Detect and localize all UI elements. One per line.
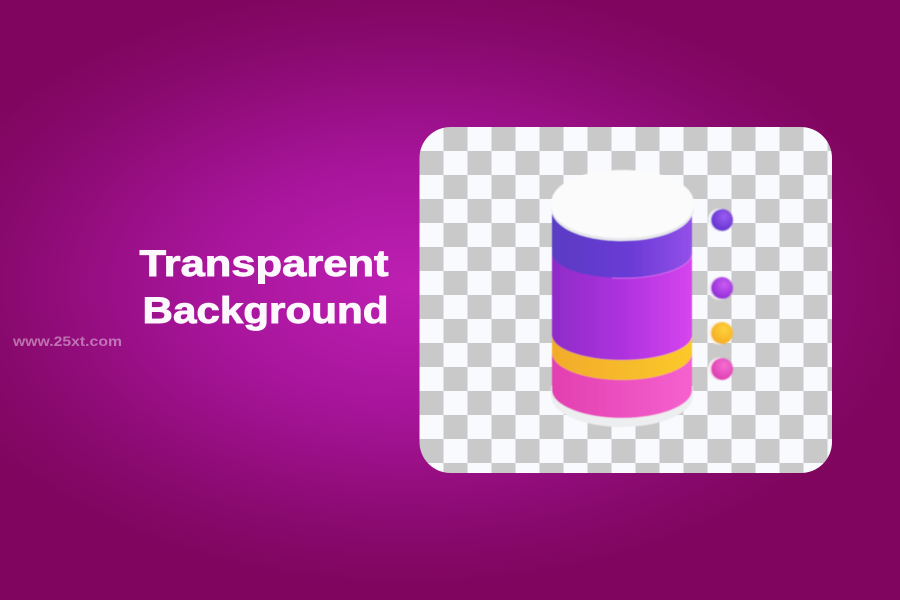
pink segment — [552, 350, 692, 418]
white base — [551, 386, 693, 427]
dot: pink — [708, 358, 733, 380]
panel: transparency checkerboard — [420, 127, 832, 473]
blue segment — [552, 210, 692, 278]
title: Transparent Background: Transparent — [140, 242, 389, 284]
watermark: www.25xt.com — [12, 333, 122, 349]
dot: blue — [708, 208, 733, 232]
violet segment — [552, 250, 692, 360]
dot: yellow — [708, 322, 733, 344]
white top face — [551, 170, 694, 238]
legend dots — [708, 208, 733, 380]
title: Transparent Background — [140, 242, 389, 331]
cylinder chart — [551, 170, 694, 427]
title: Transparent Background: Background — [142, 289, 388, 331]
dot: violet — [708, 277, 733, 300]
highlight under blue — [612, 253, 692, 278]
yellow segment — [552, 330, 692, 380]
white top rim — [551, 172, 694, 241]
